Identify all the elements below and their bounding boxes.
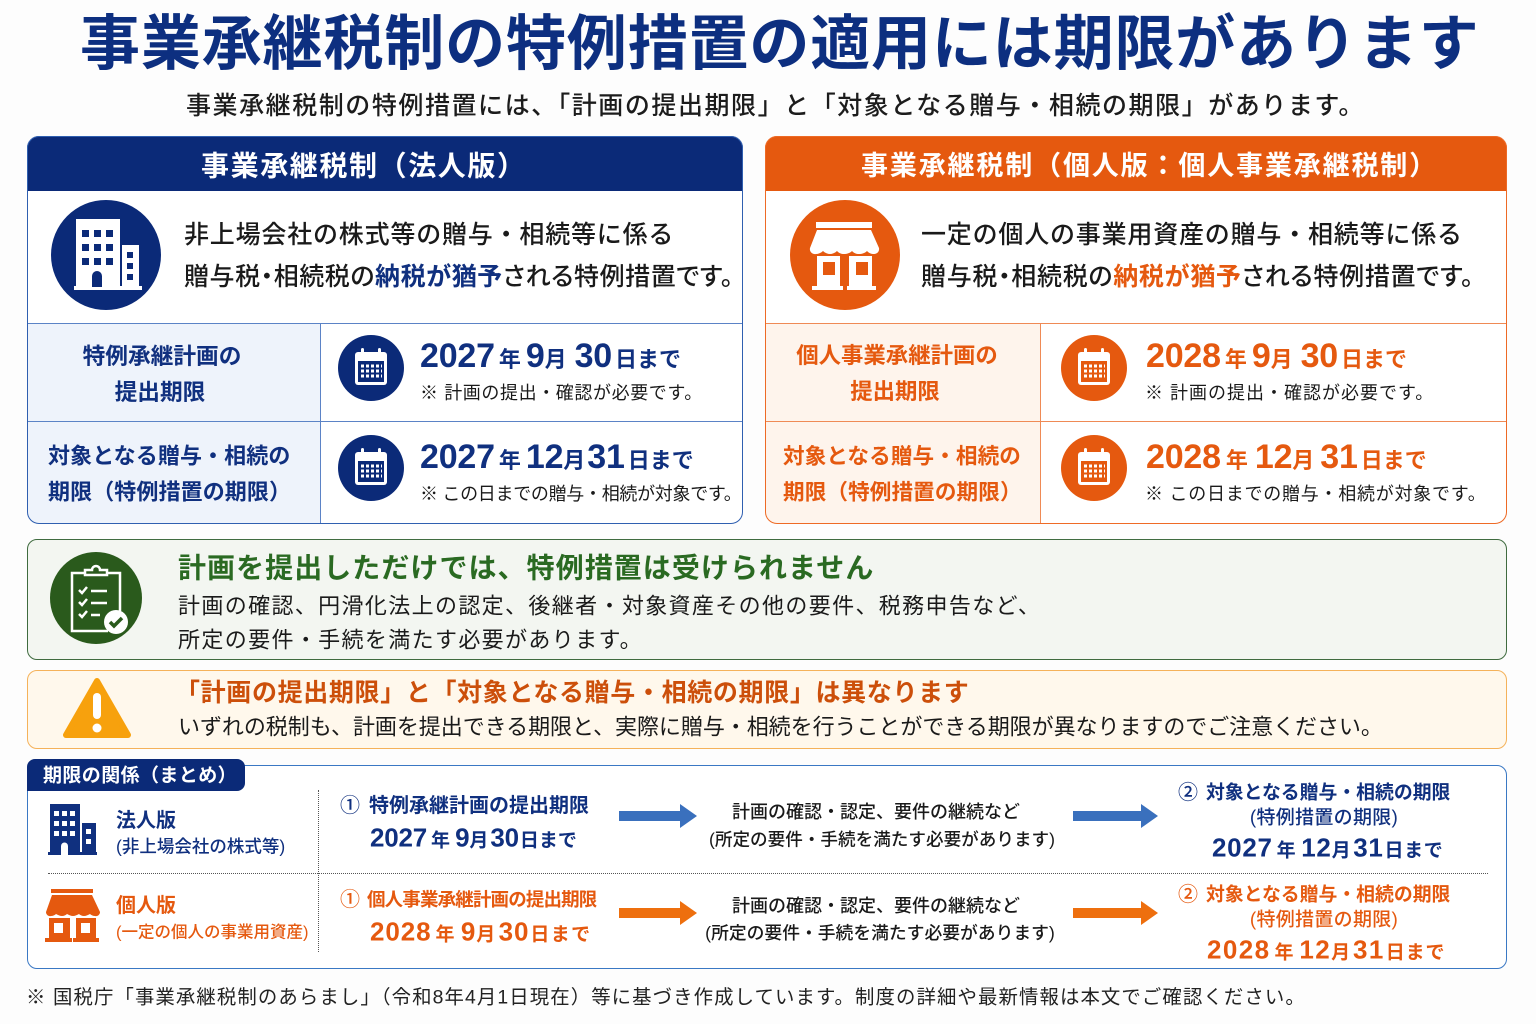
middle note: corporate: (所定の要件・手続を満たす必要があります) — [709, 829, 1055, 849]
icon: small building — [48, 804, 97, 855]
deadline: plan 2027: 2027年9月30日まで — [420, 337, 681, 375]
note: plan: ※ 計画の提出・確認が必要です。 — [420, 383, 703, 403]
arrow: corporate 2 — [1073, 804, 1158, 828]
row label: plan deadline — [27, 323, 320, 421]
arrow: individual 1 — [619, 901, 697, 925]
description: corporate — [184, 221, 734, 291]
step 1: individual: ① — [340, 889, 360, 911]
step 1: corporate — [340, 794, 589, 853]
callout heading: 計画を提出しただけでは、特例措置は受けられません — [178, 553, 874, 584]
note: individual plan: ※ 計画の提出・確認が必要です。 — [1145, 383, 1434, 403]
callout heading: 「計画の提出期限」と「対象となる贈与・相続の期限」は異なります — [175, 679, 969, 707]
icon: warning triangle — [63, 678, 131, 738]
panel heading: corporate — [27, 136, 743, 191]
title: 事業承継税制の特例措置の適用には期限があります — [80, 11, 1480, 78]
deadline: plan 2028: 2028年9月30日まで — [1146, 337, 1407, 375]
row label: gift and inheritance deadline — [27, 421, 320, 524]
step 2: corporate — [1178, 782, 1450, 863]
callout body: 所定の要件・手続を満たす必要があります。 — [178, 627, 643, 652]
arrow: individual 2 — [1073, 901, 1158, 925]
step 2: individual: ② — [1178, 884, 1198, 906]
callout body — [178, 593, 1041, 652]
step 2: corporate: 2027年12月31日まで — [1212, 833, 1443, 863]
description: individual: 一定の個人の事業用資産の贈与・相続等に係る — [921, 221, 1463, 249]
step 2: corporate: ② — [1178, 782, 1198, 804]
middle note: corporate — [709, 802, 1055, 849]
callout body: いずれの税制も、計画を提出できる期限と、実際に贈与・相続を行うことができる期限が異なりますのでご注意ください。 — [178, 714, 1383, 739]
subtitle: 事業承継税制の特例措置には、「計画の提出期限」と「対象となる贈与・相続の期限」があります。 — [186, 92, 1365, 120]
callout body: 計画の確認、円滑化法上の認定、後継者・対象資産その他の要件、税務申告など、 — [178, 593, 1041, 618]
middle note: individual: (所定の要件・手続を満たす必要があります) — [705, 923, 1055, 943]
icon: office building — [51, 200, 161, 310]
row label: individual plan deadline: 個人事業承継計画の — [796, 343, 998, 368]
step 1: corporate: 2027年9月30日まで — [370, 823, 577, 853]
panel heading: individual: 事業承継税制（個人版：個人事業承継税制） — [861, 151, 1438, 181]
panel: corporate version — [27, 136, 743, 524]
note: gift: ※ この日までの贈与・相続が対象です。 — [420, 484, 742, 504]
panel: summary of deadlines — [27, 759, 1507, 969]
step 1: individual — [340, 888, 597, 947]
middle note: individual — [705, 896, 1055, 943]
panel: individual version — [765, 136, 1507, 524]
description: corporate: 非上場会社の株式等の贈与・相続等に係る — [184, 221, 674, 249]
step 2: individual — [1178, 884, 1450, 965]
step 2: individual: 2028年12月31日まで — [1207, 935, 1445, 965]
step 2: individual: (特例措置の期限) — [1250, 910, 1398, 931]
step 2: corporate: 対象となる贈与・相続の期限 — [1206, 782, 1450, 803]
step 1: individual: 2028年9月30日まで — [370, 917, 592, 947]
middle note: corporate: 計画の確認・認定、要件の継続など — [732, 802, 1020, 822]
summary tab heading — [27, 759, 245, 791]
label: corporate summary: (非上場会社の株式等) — [116, 836, 285, 856]
icon: calendar 1 — [338, 335, 404, 401]
deadline: gift 2027: 2027年12月31日まで — [420, 438, 694, 476]
step 1: corporate: ① — [340, 795, 360, 817]
panel heading: individual — [765, 136, 1507, 191]
label: individual summary: 個人版 — [116, 895, 176, 917]
callout: deadlines differ — [27, 670, 1507, 749]
icon: small store — [45, 889, 100, 942]
label: individual summary — [116, 894, 308, 942]
label: corporate summary — [116, 810, 285, 856]
icon: storefront — [790, 200, 900, 310]
row label: individual gift deadline: 対象となる贈与・相続の — [783, 443, 1021, 468]
description: individual — [921, 221, 1474, 291]
row label: individual plan deadline: 提出期限 — [850, 379, 940, 404]
row label: gift and inheritance deadline: 期限（特例措置の期限） — [48, 479, 291, 504]
row label: gift and inheritance deadline: 対象となる贈与・相続の — [48, 443, 290, 468]
row label: individual gift deadline — [765, 421, 1040, 524]
callout: plan submission is not sufficient — [27, 539, 1507, 660]
description: corporate: 贈与税・相続税の納税が猶予される特例措置です。 — [184, 263, 734, 291]
arrow: corporate 1 — [619, 804, 697, 828]
step 1: individual: 個人事業承継計画の提出期限 — [367, 889, 596, 910]
icon: calendar 2 — [338, 435, 404, 501]
middle note: individual: 計画の確認・認定、要件の継続など — [732, 896, 1020, 916]
icon: calendar 3 — [1061, 335, 1127, 401]
label: individual summary: (一定の個人の事業用資産) — [116, 924, 308, 942]
label: corporate summary: 法人版 — [116, 810, 176, 832]
row label: individual gift deadline: 期限（特例措置の期限） — [783, 479, 1022, 504]
panel heading: corporate: 事業承継税制（法人版） — [201, 151, 527, 182]
icon: calendar 4 — [1061, 435, 1127, 501]
summary tab heading: 期限の関係（まとめ） — [43, 766, 237, 787]
step 2: individual: 対象となる贈与・相続の期限 — [1206, 884, 1450, 905]
step 1: corporate: 特例承継計画の提出期限 — [369, 795, 589, 817]
row label: individual plan deadline — [765, 323, 1040, 421]
deadline: gift 2028: 2028年12月31日まで — [1146, 438, 1427, 476]
row label: plan deadline: 提出期限 — [115, 379, 205, 405]
footnote: ※ 国税庁「事業承継税制のあらまし」（令和8年4月1日現在）等に基づき作成しています。制度の詳細や最新情報は本文でご確認ください。 — [26, 986, 1306, 1008]
icon: checklist — [50, 552, 142, 644]
description: individual: 贈与税・相続税の納税が猶予される特例措置です。 — [921, 263, 1474, 291]
row label: plan deadline: 特例承継計画の — [83, 343, 241, 369]
step 2: corporate: (特例措置の期限) — [1250, 808, 1398, 829]
note: individual gift: ※ この日までの贈与・相続が対象です。 — [1145, 484, 1486, 504]
